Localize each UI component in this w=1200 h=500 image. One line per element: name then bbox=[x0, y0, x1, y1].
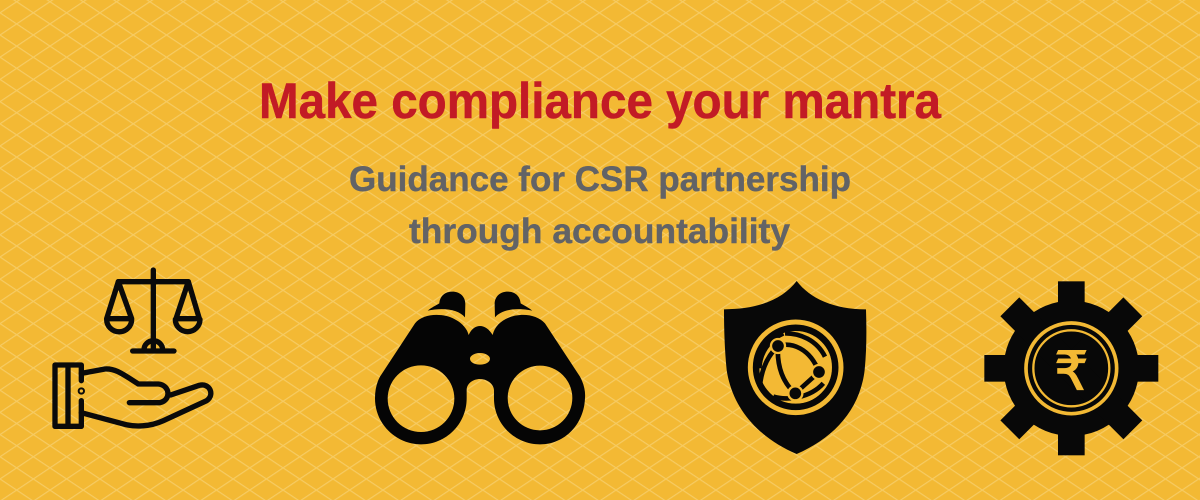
right eyepiece bbox=[495, 292, 532, 317]
title: Make compliance your mantra bbox=[259, 73, 942, 129]
icon: gear with rupee coin: ₹ bbox=[1054, 340, 1088, 402]
scales bbox=[107, 270, 200, 351]
subtitle bbox=[349, 159, 851, 251]
icon: binoculars bbox=[375, 292, 585, 444]
left eyepiece bbox=[428, 292, 465, 317]
hand bbox=[55, 365, 211, 426]
subtitle: Guidance for CSR partnership bbox=[349, 159, 851, 199]
icon: shield with network globe bbox=[724, 281, 866, 454]
icon: scales of justice over open hand bbox=[55, 270, 211, 426]
icon: gear with rupee coin bbox=[984, 281, 1158, 455]
subtitle: through accountability bbox=[409, 211, 790, 251]
